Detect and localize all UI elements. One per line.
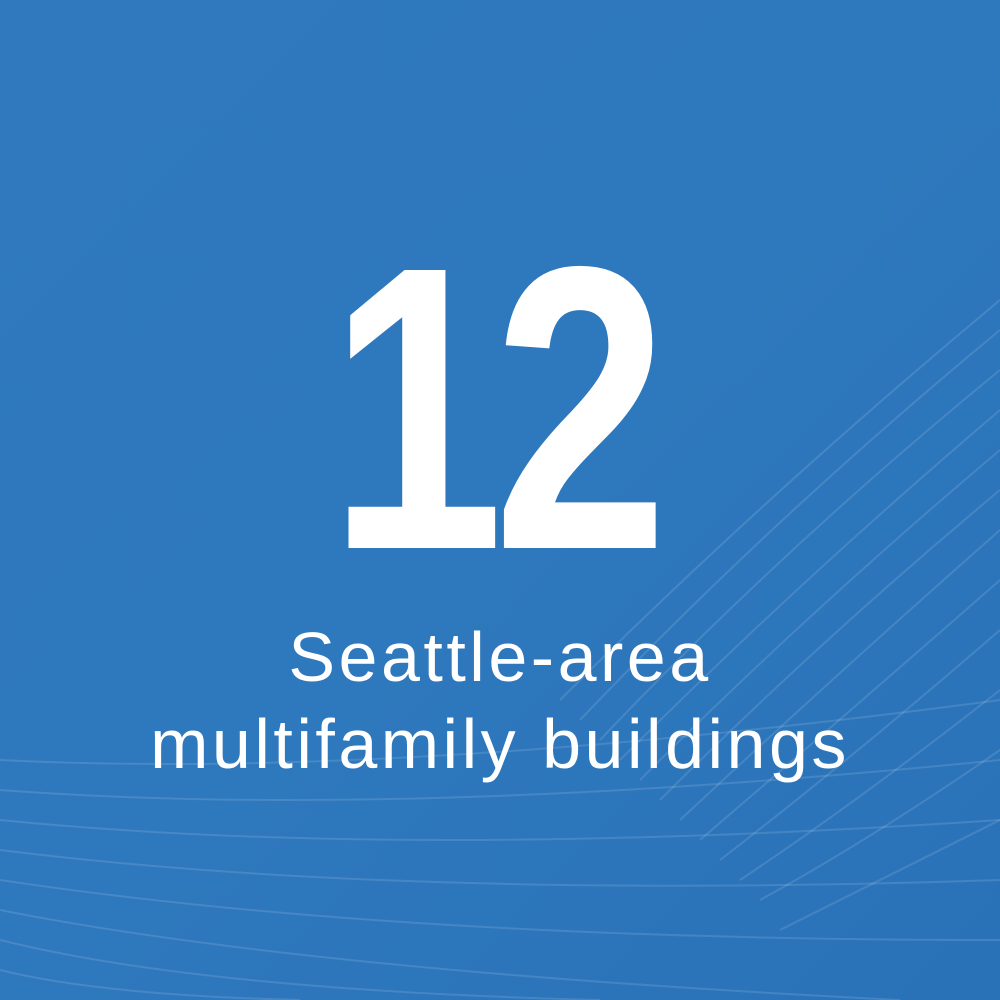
caption: Seattle-area bbox=[288, 618, 712, 696]
big number: 12 bbox=[329, 182, 657, 634]
caption bbox=[150, 618, 850, 783]
caption: multifamily buildings bbox=[150, 705, 850, 783]
